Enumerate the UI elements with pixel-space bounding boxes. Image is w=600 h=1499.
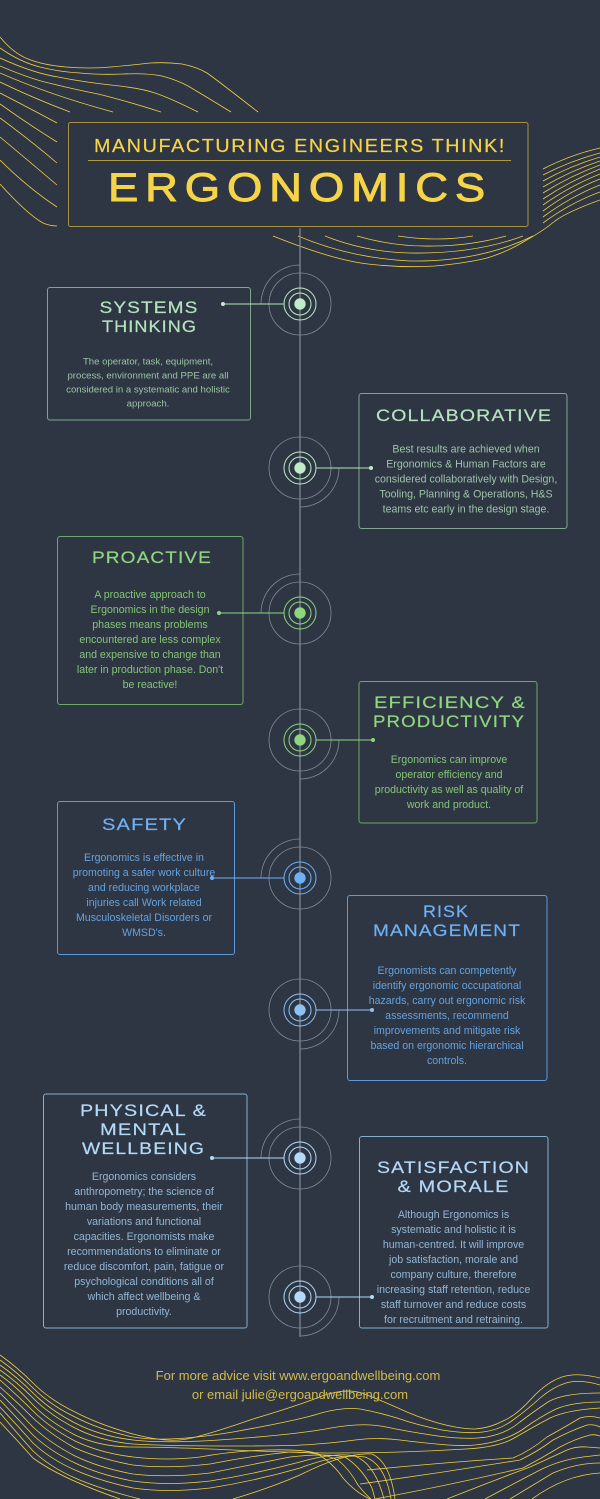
body text: Ergonomics in the design <box>91 604 210 616</box>
body text: Ergonomics considers <box>92 1171 196 1183</box>
body text: and reducing workplace <box>88 882 200 894</box>
heading: WELLBEING <box>82 1139 205 1158</box>
panel: physical and mental wellbeing <box>44 1094 247 1328</box>
panel: safety <box>58 802 234 954</box>
node: proactive <box>217 574 331 644</box>
heading: PRODUCTIVITY <box>373 712 525 731</box>
body text: encountered are less complex <box>79 634 221 646</box>
node: physical and mental wellbeing <box>210 1119 331 1189</box>
body text: Tooling, Planning & Operations, H&S <box>379 488 553 500</box>
body text: The operator, task, equipment, <box>83 356 213 368</box>
main title: ERGONOMICS <box>108 166 492 210</box>
footer contact text: For more advice visit www.ergoandwellbeing.com <box>156 1368 440 1383</box>
body text: operator efficiency and <box>396 769 503 781</box>
body text: be reactive! <box>123 679 177 691</box>
body text: productivity as well as quality of <box>375 784 523 796</box>
panel: satisfaction and morale <box>360 1136 548 1328</box>
panel: title banner <box>68 122 528 226</box>
body text <box>64 1171 225 1318</box>
body text: systematic and holistic it is <box>391 1224 516 1236</box>
body text: Musculoskeletal Disorders or <box>76 912 212 924</box>
body text: based on ergonomic hierarchical <box>370 1040 524 1052</box>
body text: approach. <box>127 398 169 410</box>
body text: recommendations to eliminate or <box>67 1246 221 1258</box>
panel: efficiency and productivity <box>359 682 537 823</box>
heading <box>373 693 526 731</box>
body text <box>77 589 223 691</box>
heading <box>80 1101 207 1158</box>
body text: assessments, recommend <box>385 1010 509 1022</box>
body text: improvements and mitigate risk <box>374 1025 521 1037</box>
timeline spine <box>299 228 301 1337</box>
body text: increasing staff retention, reduce <box>377 1284 530 1296</box>
node: collaborative <box>269 437 373 507</box>
body text: considered in a systematic and holistic <box>66 384 230 396</box>
body text: Best results are achieved when <box>392 444 540 456</box>
heading: SYSTEMS <box>100 298 198 317</box>
body text: phases means problems <box>92 619 208 631</box>
heading: PHYSICAL & <box>80 1101 207 1120</box>
body text: productivity. <box>116 1306 172 1318</box>
heading: PROACTIVE <box>92 548 212 567</box>
body text: anthropometry; the science of <box>74 1186 214 1198</box>
heading: MENTAL <box>100 1120 187 1139</box>
heading: SAFETY <box>102 815 187 834</box>
heading: EFFICIENCY & <box>374 693 526 712</box>
body text: later in production phase. Don't <box>77 664 223 676</box>
body text: A proactive approach to <box>94 589 206 601</box>
body text: promoting a safer work culture <box>73 867 215 879</box>
heading: SATISFACTION <box>377 1158 530 1177</box>
top left wave lines <box>0 37 258 226</box>
body text: human body measurements, their <box>65 1201 223 1213</box>
node: risk management <box>269 979 374 1049</box>
subtitle: MANUFACTURING ENGINEERS THINK! <box>94 136 506 156</box>
body text <box>369 965 526 1067</box>
body text: Ergonomics & Human Factors are <box>386 458 546 470</box>
body text: Ergonomists can competently <box>378 965 517 977</box>
body text: injuries call Work related <box>86 897 202 909</box>
body text: hazards, carry out ergonomic risk <box>369 995 526 1007</box>
body text <box>377 1209 530 1326</box>
body text: considered collaboratively with Design, <box>375 474 557 486</box>
body text <box>375 444 557 516</box>
heading: MANAGEMENT <box>373 921 521 940</box>
heading <box>373 902 521 940</box>
body text: work and product. <box>406 799 491 811</box>
panel: collaborative <box>359 394 567 528</box>
panel: risk management <box>348 896 547 1080</box>
body text: psychological conditions all of <box>74 1276 214 1288</box>
body text: Although Ergonomics is <box>398 1209 509 1221</box>
body text: process, environment and PPE are all <box>67 370 229 382</box>
heading: COLLABORATIVE <box>376 406 552 425</box>
body text: reduce discomfort, pain, fatigue or <box>64 1261 225 1273</box>
heading <box>377 1158 530 1196</box>
heading: THINKING <box>102 317 197 336</box>
body text: and expensive to change than <box>79 649 221 661</box>
body text: job satisfaction, morale and <box>388 1254 518 1266</box>
heading: RISK <box>423 902 469 921</box>
node: efficiency and productivity <box>269 709 375 779</box>
footer contact text: or email julie@ergoandwellbeing.com <box>192 1387 408 1402</box>
bottom wave lines <box>0 1355 600 1499</box>
body text: WMSD's. <box>122 927 166 939</box>
panel: proactive <box>58 536 243 704</box>
body text: controls. <box>427 1055 467 1067</box>
body text <box>66 356 230 410</box>
body text: teams etc early in the design stage. <box>383 504 549 516</box>
body text: variations and functional <box>87 1216 201 1228</box>
body text: which affect wellbeing & <box>87 1291 200 1303</box>
body text: for recruitment and retraining. <box>384 1314 523 1326</box>
body text: company culture, therefore <box>390 1269 517 1281</box>
panel: systems thinking <box>48 288 250 420</box>
body text: human-centred. It will improve <box>383 1239 524 1251</box>
node: systems thinking <box>221 265 331 335</box>
body text: Ergonomics can improve <box>391 754 507 766</box>
node: safety <box>210 839 331 909</box>
body text: capacities. Ergonomists make <box>74 1231 214 1243</box>
footer contact text <box>156 1368 440 1402</box>
body text <box>73 852 215 939</box>
heading: & MORALE <box>398 1177 510 1196</box>
body text <box>375 754 523 811</box>
body text: identify ergonomic occupational <box>373 980 521 992</box>
heading <box>100 298 198 336</box>
top right wave lines <box>273 148 600 267</box>
body text: Ergonomics is effective in <box>84 852 204 864</box>
body text: staff turnover and reduce costs <box>381 1299 526 1311</box>
node: satisfaction and morale <box>269 1266 374 1336</box>
